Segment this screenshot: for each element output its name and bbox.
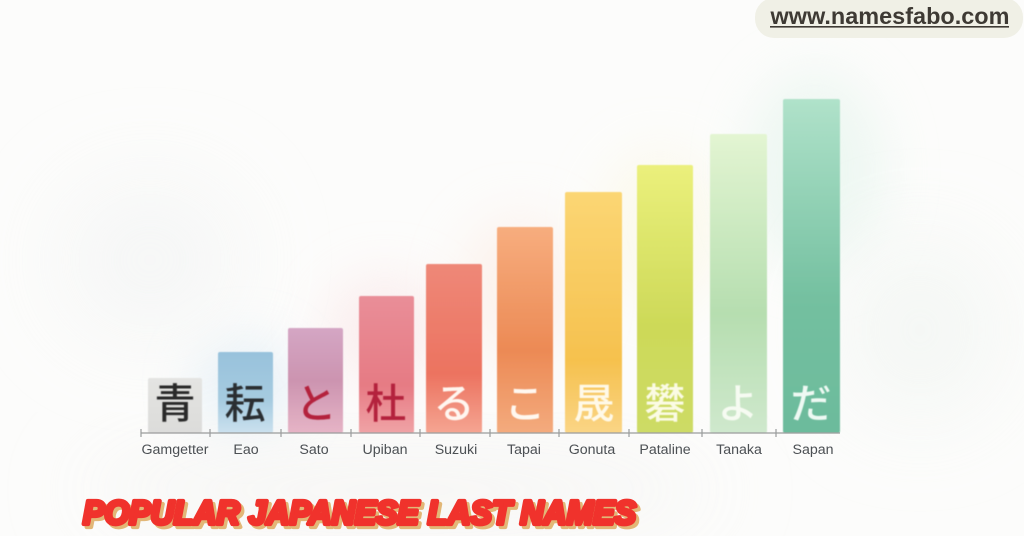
label: Tapai: Tapai bbox=[507, 442, 541, 458]
glyph 3: と bbox=[296, 370, 336, 430]
bar: Sapan bbox=[783, 99, 840, 433]
bar: Upiban bbox=[359, 296, 414, 433]
bar chart bbox=[148, 99, 840, 433]
bar: Pataline bbox=[637, 165, 693, 433]
title: POPULAR JAPANESE LAST NAMES bbox=[83, 494, 636, 531]
glyph 1: 青 bbox=[154, 370, 196, 430]
glyph 9: よ bbox=[718, 370, 758, 430]
glyph 10: だ bbox=[790, 370, 832, 430]
label: Sapan: Sapan bbox=[792, 442, 834, 458]
glyph 5: る bbox=[434, 370, 474, 430]
label: Upiban: Upiban bbox=[363, 442, 407, 458]
glyph 4: 杜 bbox=[366, 370, 406, 430]
label: Gamgetter: Gamgetter bbox=[141, 442, 209, 458]
bar: Suzuki bbox=[426, 264, 482, 433]
title: POPULAR JAPANESE LAST NAMES bbox=[86, 497, 639, 534]
label: Suzuki: Suzuki bbox=[435, 442, 477, 458]
glyph 7: 晟 bbox=[574, 370, 614, 430]
bar: Gamgetter bbox=[148, 378, 202, 433]
axis labels bbox=[141, 442, 834, 458]
label: Sato: Sato bbox=[299, 442, 329, 458]
axis line with ticks bbox=[141, 429, 840, 437]
glyph 6: こ bbox=[504, 370, 546, 430]
label: Tanaka: Tanaka bbox=[716, 442, 762, 458]
bar: Tapai bbox=[497, 227, 553, 433]
glyph 8: 礬 bbox=[644, 370, 686, 430]
glyph 2: 耘 bbox=[224, 370, 266, 430]
website badge: www.namesfabo.com bbox=[769, 3, 1010, 29]
label: Gonuta: Gonuta bbox=[569, 442, 615, 458]
website badge bbox=[755, 0, 1023, 38]
label: Pataline: Pataline bbox=[639, 442, 691, 458]
glyphs on bars bbox=[154, 370, 832, 430]
label: Eao: Eao bbox=[233, 442, 259, 458]
bar: Tanaka bbox=[710, 134, 767, 433]
bar: Eao bbox=[218, 352, 273, 433]
bar: Gonuta bbox=[565, 192, 622, 433]
bar: Sato bbox=[288, 328, 343, 433]
